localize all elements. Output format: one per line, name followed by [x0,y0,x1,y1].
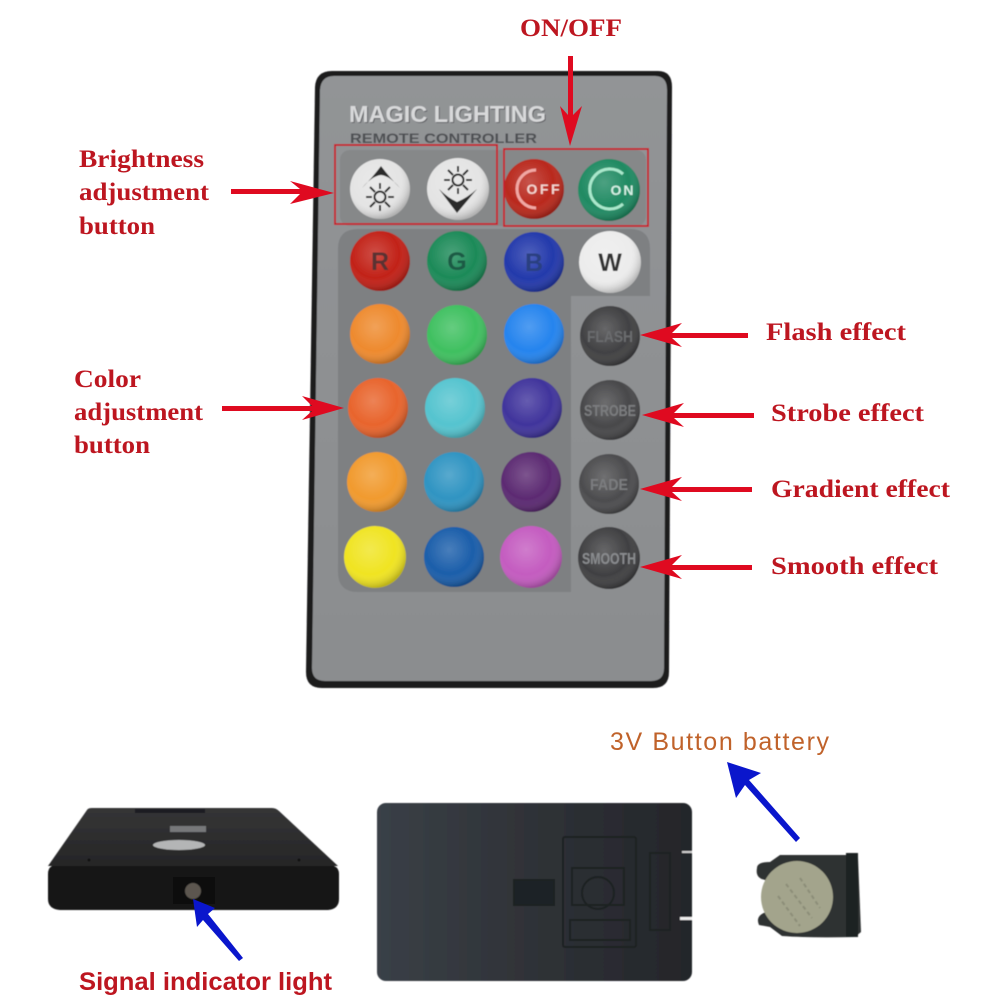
arrow: brightness [231,181,334,204]
indicator light [185,883,201,899]
label: strobe: Strobe effect [771,400,925,427]
brand text [349,101,547,146]
label: brightness: Brightness [79,146,204,173]
label: colour: Color [74,366,141,393]
remote body [306,71,672,688]
brand text: REMOTE CONTROLLER [350,130,537,146]
brightness up button [350,159,410,219]
on/off highlight box [504,149,648,226]
button battery photo [757,853,861,937]
remote edge view [48,808,339,910]
brand text: MAGIC LIGHTING [350,102,547,128]
edge side face [48,866,339,910]
arrow: flash [640,323,748,347]
remote control front [306,71,672,688]
R G B W buttons [350,231,641,293]
brightness down button [427,158,489,220]
brand text: MAGIC LIGHTING [349,101,546,127]
effect buttons: FADE [590,477,628,494]
label: ON/OFF: ON/OFF [520,15,622,42]
button recess panel [338,229,650,592]
arrow: battery [727,762,800,842]
OFF button: OFF [526,181,560,197]
label: battery: 3V Button battery [610,728,830,756]
R G B W buttons: W [598,249,622,277]
R G B W buttons: G [447,248,467,276]
R G B W buttons: B [525,249,543,277]
brightness highlight box [335,145,497,224]
label: signal indicator: Signal indicator light [79,968,333,996]
top button recess [340,150,646,226]
OFF button [504,159,564,219]
arrow: strobe [642,403,754,427]
colour buttons grid [344,304,564,588]
label: brightness: adjustment [79,179,210,206]
ON button [578,159,640,221]
R G B W buttons: R [371,248,389,276]
edge sticker [153,840,205,850]
effect buttons: FLASH [587,329,633,346]
label: colour: button [74,432,150,459]
label: flash: Flash effect [766,319,907,346]
arrow: gradient [640,477,752,501]
arrow: signal indicator [193,899,243,961]
ON button: ON [610,182,634,198]
label: smooth: Smooth effect [771,553,939,580]
remote back view [377,803,692,981]
side notches [682,851,692,853]
arrow: ON/OFF [560,56,582,146]
label: brightness: button [79,213,155,240]
effect buttons: STROBE [584,403,636,420]
label: colour: adjustment [74,399,204,426]
effect buttons: SMOOTH [582,551,636,568]
edge top face [48,808,338,866]
arrow: colour [222,396,344,420]
arrow: smooth [640,555,752,579]
effect buttons [578,306,640,589]
label: gradient: Gradient effect [771,476,951,503]
battery cover outline [514,837,670,947]
